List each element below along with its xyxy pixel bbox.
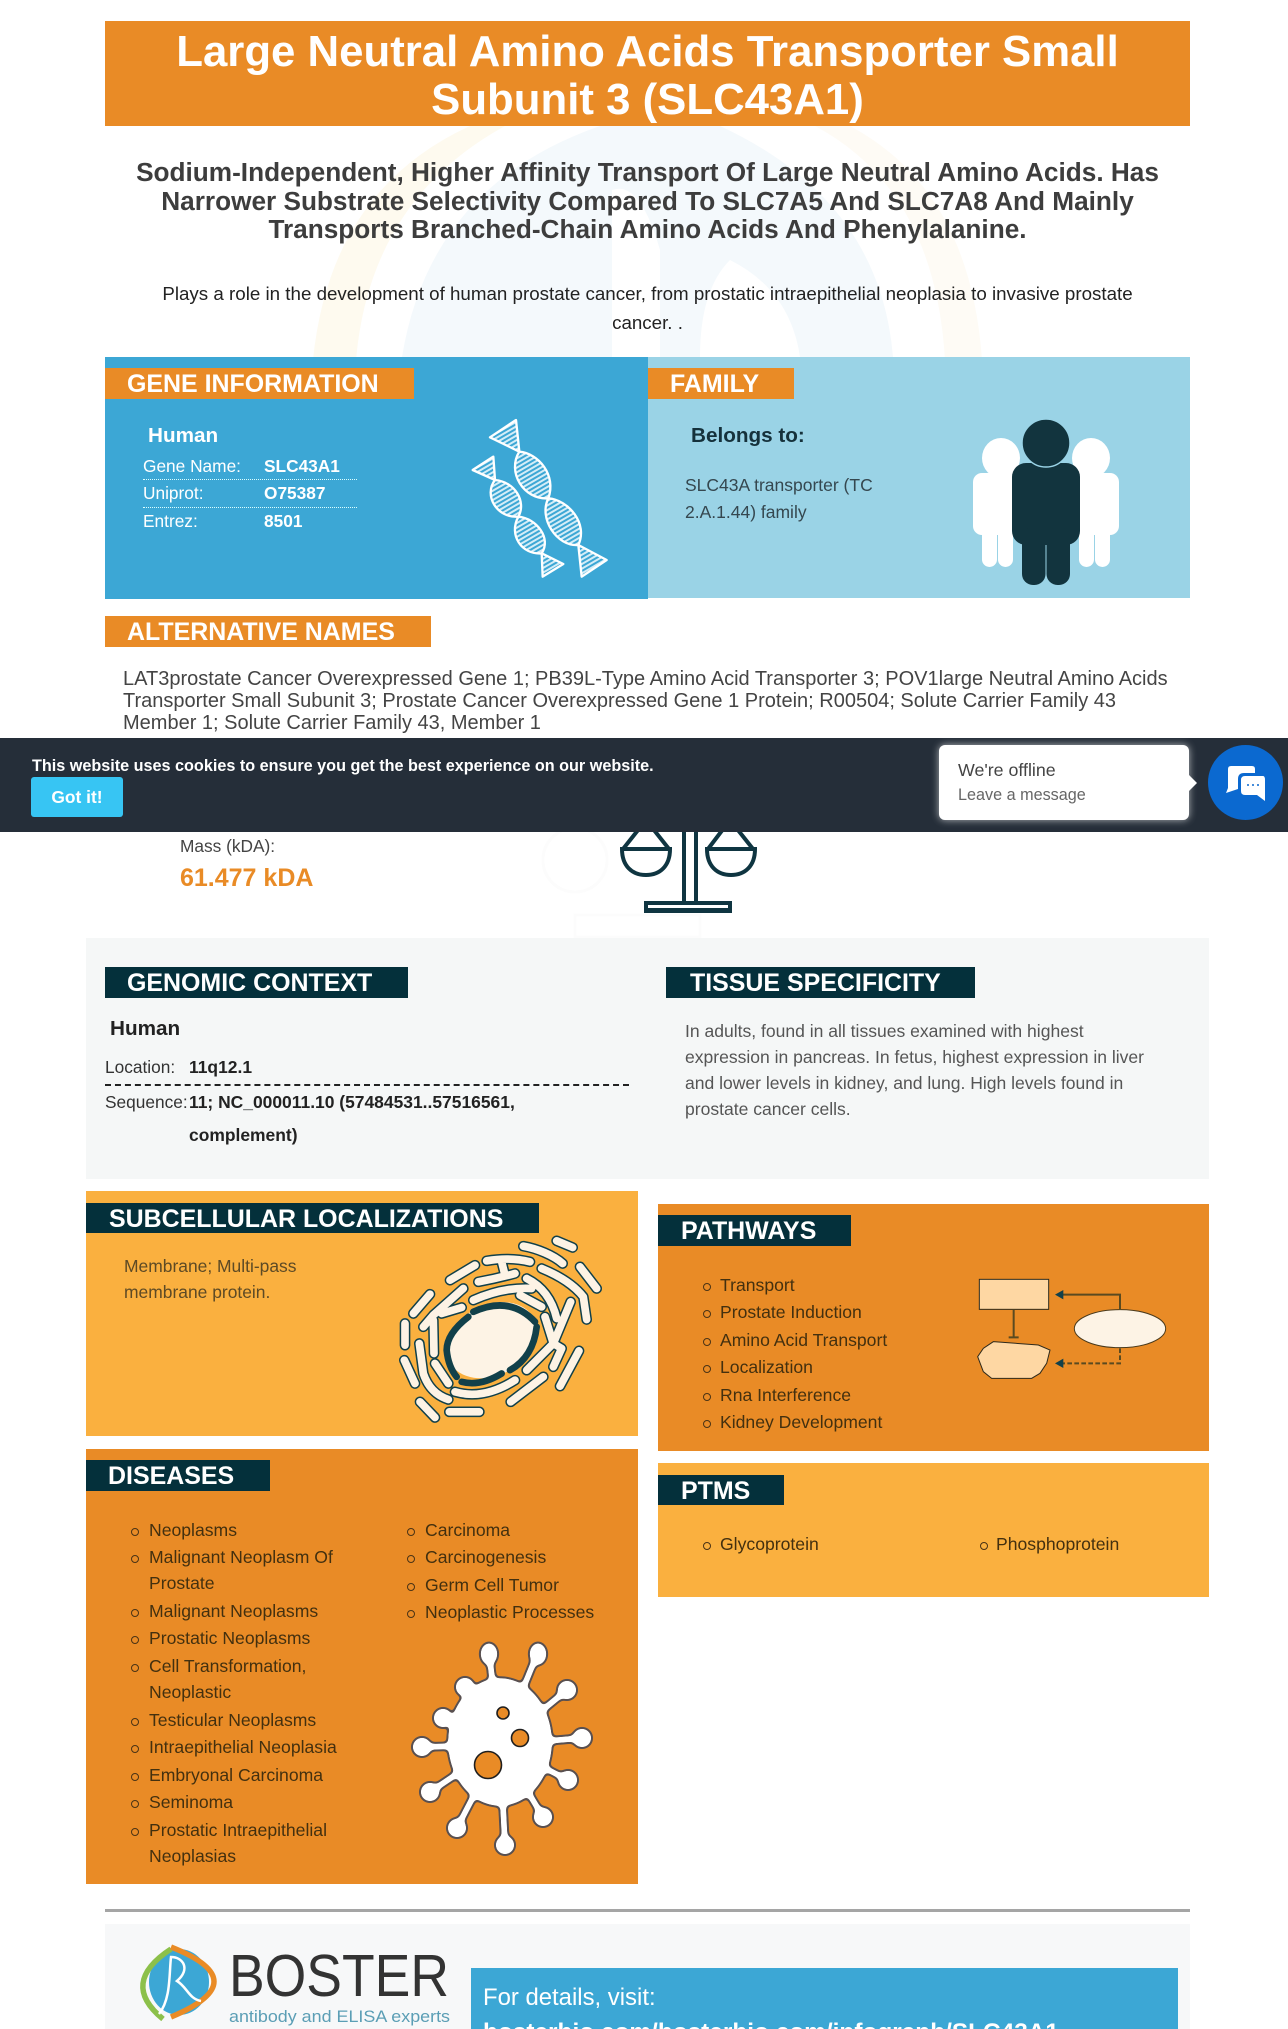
gene fields: Gene Name:	[143, 456, 241, 476]
diseases list column 1: Neoplasms	[149, 1520, 237, 1540]
description: cancer. .	[612, 312, 683, 333]
diseases list column 1: Neoplastic	[149, 1682, 231, 1702]
diseases list column 1: Prostatic Intraepithelial	[149, 1820, 327, 1840]
details box	[471, 1968, 1178, 2029]
icon: scale	[620, 832, 757, 913]
diseases list column 1: Prostate	[149, 1573, 215, 1593]
icon: pathway diagram	[977, 1278, 1166, 1379]
pathways list: Prostate Induction	[720, 1302, 862, 1322]
tissue text: and lower levels in kidney, and lung. High levels found in	[685, 1073, 1123, 1093]
logo: Boster	[140, 1943, 450, 2026]
diseases list column 1: Neoplasias	[149, 1846, 236, 1866]
molecular mass	[180, 836, 313, 892]
alternative names text	[123, 668, 1168, 734]
diseases list column 1: Seminoma	[149, 1792, 233, 1812]
panel: pathways	[658, 1204, 1209, 1451]
PTMs list: Phosphoprotein	[996, 1534, 1119, 1554]
heading: PTMs	[658, 1475, 784, 1505]
pathways list: Rna Interference	[720, 1385, 851, 1405]
heading: diseases: DISEASES	[108, 1462, 234, 1490]
tissue text	[685, 1021, 1144, 1119]
gene fields: 8501	[264, 511, 302, 531]
family text	[685, 475, 873, 522]
heading: diseases	[86, 1460, 270, 1491]
gene fields	[143, 456, 357, 531]
heading: subcellular localizations: SUBCELLULAR LOCALIZATIONS	[109, 1205, 503, 1233]
species: Human	[148, 424, 218, 447]
pathways list: Transport	[720, 1275, 795, 1295]
logo: Boster: BOSTER	[229, 1943, 449, 2009]
pathways list: Localization	[720, 1357, 813, 1377]
panel: gene information	[105, 357, 648, 599]
icon: people	[973, 420, 1119, 585]
diseases list column 1: Malignant Neoplasms	[149, 1601, 318, 1621]
footer divider	[105, 1909, 1190, 1912]
icon: cell	[399, 1236, 602, 1423]
tissue text: prostate cancer cells.	[685, 1099, 851, 1119]
panel: diseases	[86, 1449, 638, 1884]
logo: Boster: antibody and ELISA experts	[229, 2007, 450, 2026]
details box: For details, visit:	[483, 1984, 656, 2011]
species: Human	[110, 1017, 180, 1040]
title: Subunit 3 (SLC43A1)	[431, 75, 864, 124]
genomic fields: complement)	[189, 1125, 298, 1145]
alternative names text: Transporter Small Subunit 3; Prostate Cancer Overexpressed Gene 1 Protein; R00504; Solute Carrier Family 43	[123, 690, 1116, 712]
gene fields: O75387	[264, 483, 326, 503]
diseases list column 1: Prostatic Neoplasms	[149, 1628, 310, 1648]
heading: gene information: GENE INFORMATION	[127, 370, 379, 398]
title: Large Neutral Amino Acids Transporter Small	[176, 27, 1119, 76]
pathways list: Amino Acid Transport	[720, 1330, 887, 1350]
diseases list column 2	[407, 1520, 594, 1622]
chat bubble	[939, 745, 1189, 820]
subtitle: Sodium-Independent, Higher Affinity Transport Of Large Neutral Amino Acids. Has	[136, 157, 1159, 187]
diseases list column 1	[131, 1520, 337, 1866]
cookie message: This website uses cookies to ensure you get the best experience on our website.	[32, 757, 654, 775]
heading: alternative names: ALTERNATIVE NAMES	[127, 618, 395, 646]
icon: DNA	[472, 418, 608, 578]
genomic fields: Location:	[105, 1057, 175, 1077]
PTMs list: Glycoprotein	[720, 1534, 819, 1554]
molecular mass: Mass (kDA):	[180, 836, 275, 856]
heading: family	[648, 368, 794, 399]
chat bubble: Leave a message	[958, 786, 1086, 804]
pathways list: Kidney Development	[720, 1412, 882, 1432]
gene fields: Entrez:	[143, 511, 198, 531]
panel: footer	[105, 1924, 1190, 2029]
panel: PTMs	[658, 1463, 1209, 1597]
panel: genomic context and tissue specificity	[86, 938, 1209, 1179]
diseases list column 2: Germ Cell Tumor	[425, 1575, 559, 1595]
gene fields: SLC43A1	[264, 456, 340, 476]
localization text: membrane protein.	[124, 1282, 270, 1302]
heading: tissue specificity: TISSUE SPECIFICITY	[690, 969, 941, 997]
localization text	[124, 1256, 296, 1302]
description	[162, 283, 1133, 333]
alternative names text: LAT3prostate Cancer Overexpressed Gene 1; PB39L-Type Amino Acid Transporter 3; POV1large Neutral Amino Acids	[123, 668, 1168, 690]
gene fields: Uniprot:	[143, 483, 204, 503]
subtitle: Transports Branched-Chain Amino Acids And Phenylalanine.	[268, 214, 1027, 244]
got it button	[31, 777, 123, 817]
diseases list column 1: Testicular Neoplasms	[149, 1710, 316, 1730]
diseases list column 1: Cell Transformation,	[149, 1656, 306, 1676]
diseases list column 2: Carcinogenesis	[425, 1547, 546, 1567]
panel: subcellular localizations	[86, 1191, 638, 1436]
heading: genomic context: GENOMIC CONTEXT	[127, 969, 372, 997]
family text: 2.A.1.44) family	[685, 502, 807, 522]
heading: pathways	[658, 1215, 851, 1246]
tissue text: expression in pancreas. In fetus, highest expression in liver	[685, 1047, 1144, 1067]
icon: chat button	[1208, 745, 1283, 820]
description: Plays a role in the development of human prostate cancer, from prostatic intraepithelial neoplasia to invasive prostate	[162, 283, 1133, 304]
genomic fields: 11q12.1	[189, 1057, 252, 1077]
alternative names text: Member 1; Solute Carrier Family 43, Member 1	[123, 712, 541, 734]
subtitle	[136, 157, 1159, 244]
localization text: Membrane; Multi-pass	[124, 1256, 296, 1276]
heading: PTMs: PTMS	[681, 1477, 750, 1505]
genomic fields: 11; NC_000011.10 (57484531..57516561,	[189, 1092, 515, 1112]
subtitle: Narrower Substrate Selectivity Compared To SLC7A5 And SLC7A8 And Mainly	[161, 186, 1134, 216]
belongs to: Belongs to:	[691, 424, 805, 447]
title	[105, 21, 1190, 126]
heading: pathways: PATHWAYS	[681, 1217, 816, 1245]
heading: family: FAMILY	[670, 370, 759, 398]
genomic fields: Sequence:	[105, 1092, 188, 1112]
diseases list column 1: Malignant Neoplasm Of	[149, 1547, 333, 1567]
family text: SLC43A transporter (TC	[685, 475, 873, 495]
PTMs list	[703, 1534, 1119, 1554]
cookie banner	[0, 738, 1288, 832]
panel: family	[648, 357, 1190, 598]
diseases list column 1: Embryonal Carcinoma	[149, 1765, 323, 1785]
diseases list column 2: Carcinoma	[425, 1520, 510, 1540]
molecular mass: 61.477 kDA	[180, 864, 313, 892]
diseases list column 2: Neoplastic Processes	[425, 1602, 594, 1622]
genomic fields	[105, 1057, 629, 1145]
diseases list column 1: Intraepithelial Neoplasia	[149, 1737, 337, 1757]
tissue text: In adults, found in all tissues examined with highest	[685, 1021, 1084, 1041]
pathways list	[703, 1275, 888, 1432]
icon: virus	[410, 1642, 593, 1856]
chat bubble: We're offline	[958, 760, 1056, 780]
got it button: Got it!	[51, 787, 103, 807]
